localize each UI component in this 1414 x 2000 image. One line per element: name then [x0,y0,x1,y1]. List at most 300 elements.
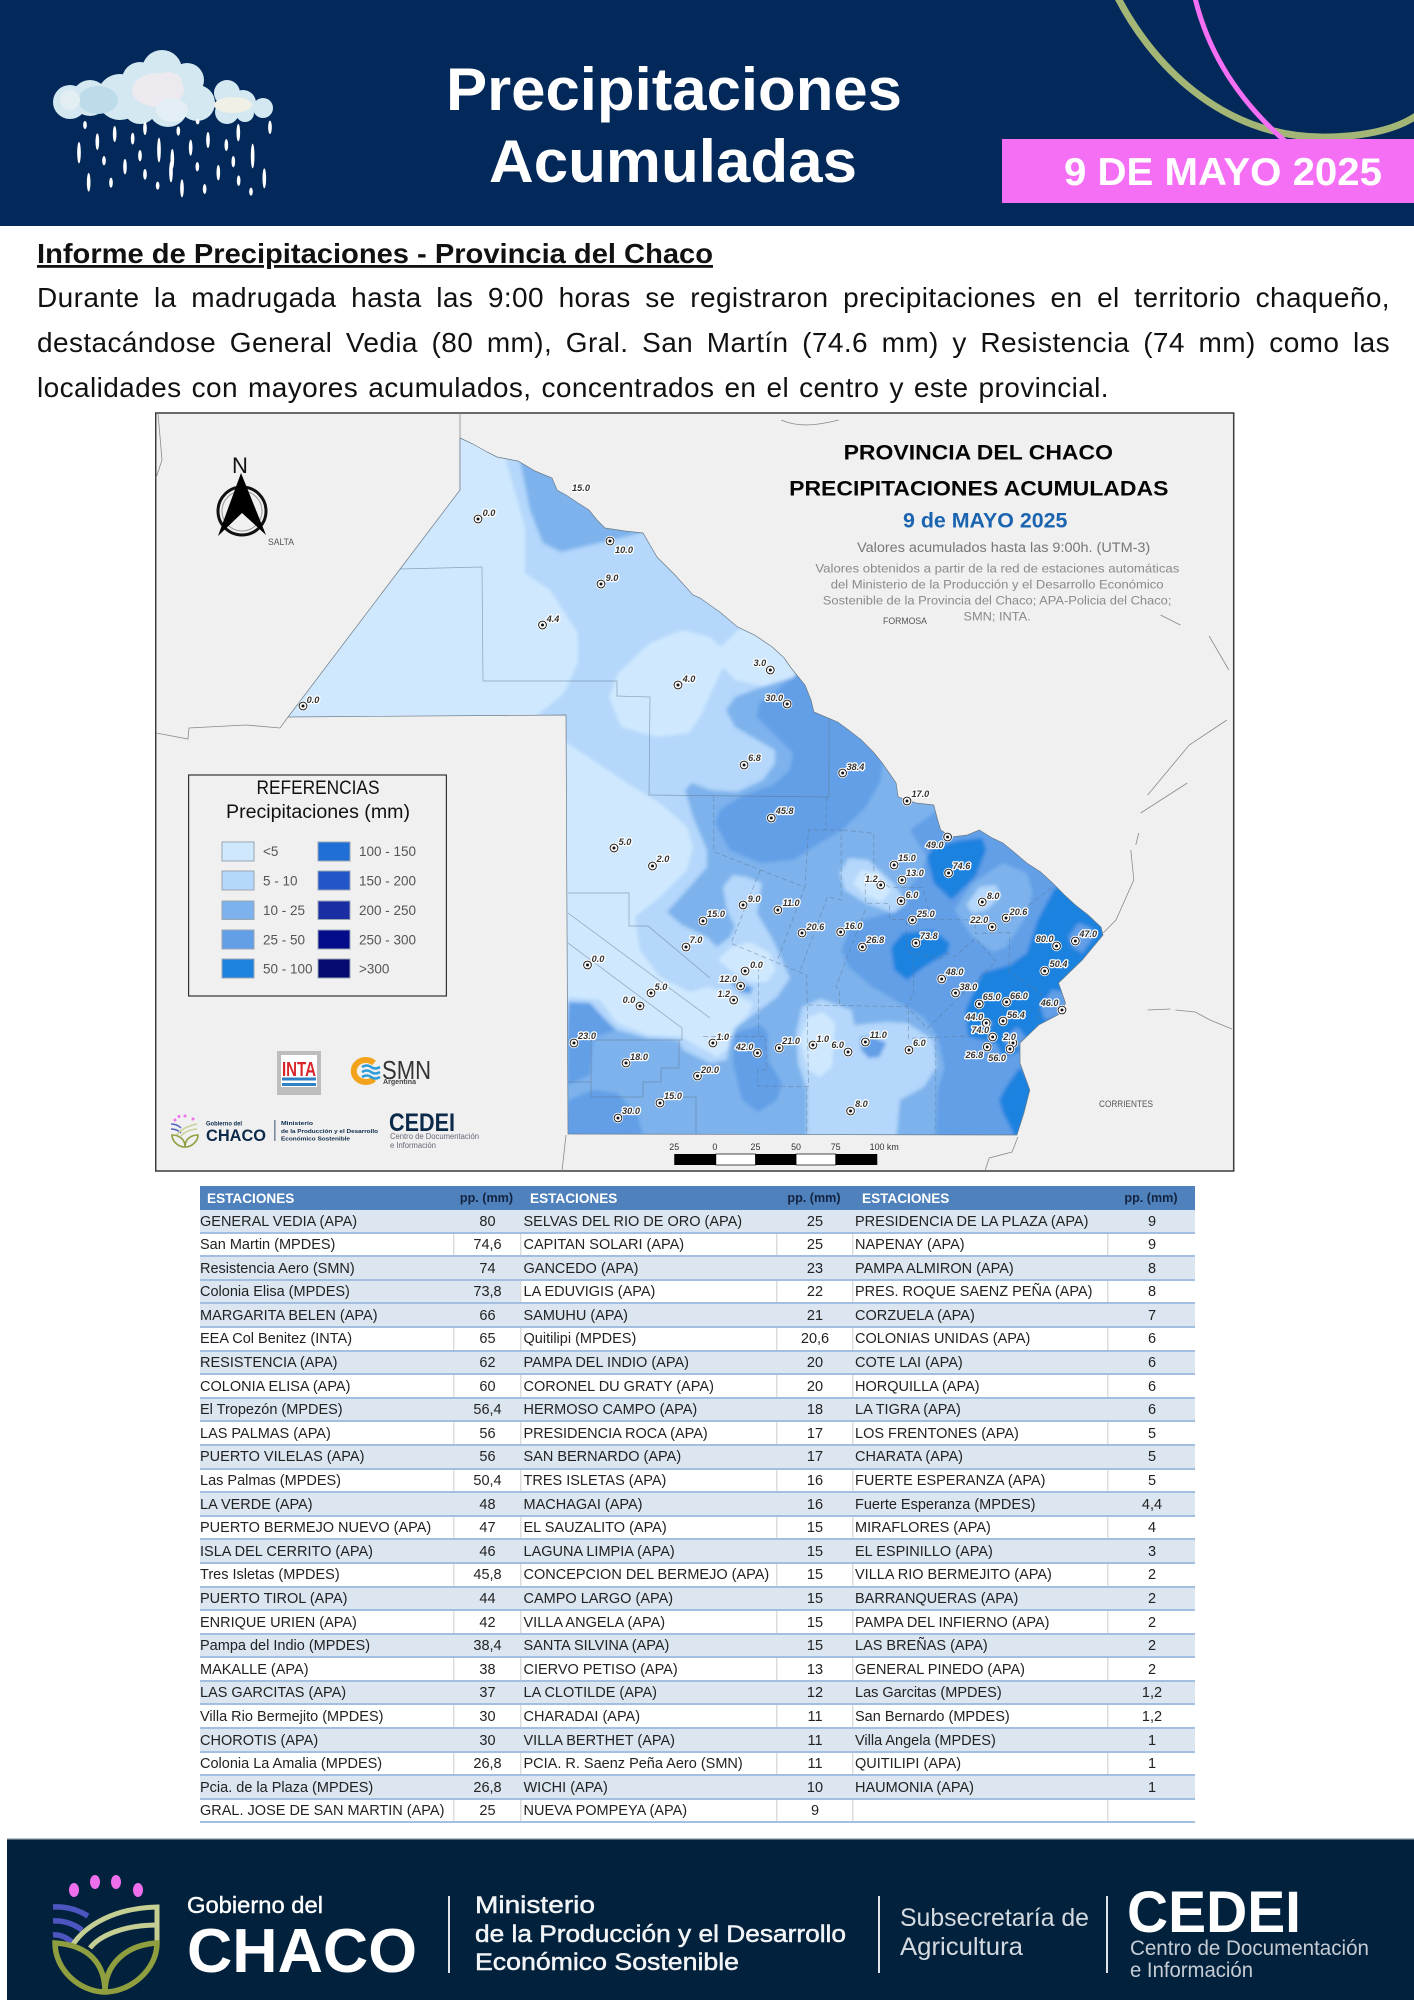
map title block: Valores obtenidos a partir de la red de estaciones automáticas [815,561,1179,576]
station value labels: 12.0 [719,974,737,984]
station value labels: 0.0 [592,954,605,964]
rainfall zones [289,438,1103,1135]
stations table: CIERVO PETISO (APA) [524,1662,678,1678]
station value labels: 0.0 [483,508,496,518]
stations table: 2 [1148,1591,1156,1607]
station value labels: 30.0 [622,1106,641,1116]
stations table: LA VERDE (APA) [200,1497,313,1513]
stations table: MAKALLE (APA) [200,1662,309,1678]
stations table: COTE LAI (APA) [855,1355,963,1371]
station value labels: 8.0 [987,891,999,901]
legend: Precipitaciones (mm) [226,802,410,823]
legend: 200 - 250 [359,903,416,918]
logo: Gobierno del Chaco small: Gobierno del [206,1120,242,1128]
stations table: EEA Col Benitez (INTA) [200,1331,352,1347]
icon: north arrow: N [232,453,248,478]
stations table: GENERAL PINEDO (APA) [855,1662,1025,1678]
station value labels: 65.0 [983,992,1001,1002]
legend: >300 [359,962,389,976]
station value labels: 50.4 [1050,959,1067,969]
map title block: PROVINCIA DEL CHACO [844,441,1113,465]
stations table: CORZUELA (APA) [855,1308,975,1324]
station value labels: 1.2 [717,989,730,999]
neighbouring province names: SALTA [268,537,294,547]
stations table: Pcia. de la Plaza (MPDES) [200,1780,373,1796]
stations table: 38 [479,1662,496,1678]
stations table: LAGUNA LIMPIA (APA) [524,1544,675,1560]
stations table: SAMUHU (APA) [524,1308,628,1324]
logo: SMN: Argentina [383,1079,416,1086]
stations table: 17 [807,1426,823,1442]
stations table: ENRIQUE URIEN (APA) [200,1615,357,1631]
stations table: 2 [1148,1615,1156,1631]
station value labels: 16.0 [845,921,862,931]
map title block: Sostenible de la Provincia del Chaco; APA-Policia del Chaco; [823,593,1171,608]
stations table: 73,8 [473,1284,502,1300]
stations table: Pampa del Indio (MPDES) [200,1638,370,1654]
table header: ESTACIONES [862,1191,949,1206]
station value labels: 11.0 [870,1030,887,1040]
stations table: 15 [807,1567,823,1583]
station value labels: 26.8 [964,1050,984,1060]
stations table: LA EDUVIGIS (APA) [524,1284,655,1300]
rainfall map panel [155,412,1234,1172]
stations table: Fuerte Esperanza (MPDES) [855,1497,1036,1513]
station value labels: 4.0 [682,674,696,684]
text: Ministerio: Económico Sostenible [475,1949,739,1976]
stations table: QUITILIPI (APA) [855,1756,961,1772]
stations table: GRAL. JOSE DE SAN MARTIN (APA) [200,1803,444,1819]
stations table: 15 [807,1544,823,1560]
stations table: TRES ISLETAS (APA) [524,1473,666,1489]
station value labels: 38.0 [960,982,977,992]
table header: ESTACIONES [530,1191,617,1206]
station value labels: 1.0 [716,1032,729,1042]
station value labels: 15.0 [898,853,916,863]
stations table: MIRAFLORES (APA) [855,1520,991,1536]
date badge: 9 DE MAYO 2025 [1064,151,1382,194]
scale bar: 50 [791,1142,801,1152]
stations table: 22 [807,1284,823,1300]
stations table: NAPENAY (APA) [855,1237,965,1253]
station value labels: 20.0 [700,1065,720,1075]
stations table: 5 [1148,1449,1156,1465]
legend: REFERENCIAS [256,778,380,799]
map title block: PRECIPITACIONES ACUMULADAS [789,477,1169,501]
stations table: 30 [479,1733,496,1749]
stations table: COLONIAS UNIDAS (APA) [855,1331,1030,1347]
stations table: 1,2 [1142,1685,1162,1701]
stations table: 9 [811,1803,819,1819]
stations table: LA TIGRA (APA) [855,1402,961,1418]
station value labels: 6.0 [906,890,918,900]
title: Precipitaciones [446,56,902,123]
station value labels: 6.0 [913,1038,926,1048]
stations table: GANCEDO (APA) [524,1261,638,1277]
station value labels: 1.2 [865,874,878,884]
stations table: 4 [1148,1520,1156,1536]
station value labels: 38.4 [847,762,864,772]
logo: Gobierno del Chaco small: Ministerio [281,1121,314,1127]
report body text: localidades con mayores acumulados, concentrados en el centro y este provincial. [37,372,1109,403]
stations table: PRESIDENCIA ROCA (APA) [524,1426,708,1442]
stations table: 44 [479,1591,496,1607]
stations table: Quitilipi (MPDES) [524,1331,636,1347]
stations table [200,1186,1195,1823]
station value labels: 5.0 [655,982,668,992]
text: CEDEI: Centro de Documentación [1130,1937,1369,1960]
text: Ministerio [475,1892,846,1976]
station value labels: 23.0 [577,1031,597,1041]
report body text: destacándose General Vedia (80 mm), Gral. San Martín (74.6 mm) y Resistencia (74 mm) como las [37,326,1390,358]
stations table: 48 [479,1497,496,1513]
stations table: 15 [807,1520,823,1536]
logo: CEDEI small: e Información [390,1141,436,1150]
stations table: CAPITAN SOLARI (APA) [524,1237,684,1253]
stations table: PRES. ROQUE SAENZ PEÑA (APA) [855,1284,1092,1300]
station value labels: 74.6 [953,861,971,871]
stations table: 11 [807,1733,823,1749]
station value labels: 25.0 [916,909,935,919]
stations table: Colonia La Amalia (MPDES) [200,1756,382,1772]
neighbouring province names [268,537,1153,1109]
stations table: 46 [479,1544,496,1560]
stations table: GENERAL VEDIA (APA) [200,1214,357,1230]
station value labels: 22.0 [969,915,988,925]
station value labels: 73.8 [920,931,939,941]
stations table: WICHI (APA) [524,1780,608,1796]
stations table: 1 [1148,1780,1156,1796]
stations table: 5 [1148,1473,1156,1489]
station value labels: 8.0 [855,1099,868,1109]
decorative arcs [1118,0,1414,141]
stations table: 20,6 [801,1331,829,1347]
table header: pp. (mm) [787,1191,841,1205]
station value labels: 15.0 [707,909,726,919]
station value labels: 10.0 [615,545,634,555]
station value labels: 80.0 [1036,934,1054,944]
stations table: 15 [807,1638,823,1654]
stations table: MACHAGAI (APA) [524,1497,642,1513]
stations table: LA CLOTILDE (APA) [524,1685,657,1701]
stations table: 8 [1148,1284,1156,1300]
stations table: 16 [807,1497,823,1513]
stations table: 6 [1148,1402,1156,1418]
stations table: 30 [479,1709,496,1725]
stations table: LAS GARCITAS (APA) [200,1685,346,1701]
station value labels: 42.0 [735,1042,753,1052]
stations table: CORONEL DU GRATY (APA) [524,1379,714,1395]
map title block: 9 de MAYO 2025 [903,509,1068,533]
legend: 100 - 150 [359,844,416,859]
stations table: 2 [1148,1638,1156,1654]
station value labels: 30.0 [765,693,783,703]
stations table: 9 [1148,1237,1156,1253]
stations table: 23 [807,1261,823,1277]
stations table: 26,8 [473,1780,502,1796]
logo: SMN: SMN [382,1055,431,1085]
table header: pp. (mm) [1124,1191,1178,1205]
text: Gobierno del Chaco: Gobierno del [187,1892,323,1918]
footer banner [7,1838,1414,2000]
logo: CEDEI small: CEDEI [389,1109,455,1137]
station value labels: 0.0 [750,960,763,970]
station value labels: 7.0 [690,935,703,945]
text: CEDEI: CEDEI [1127,1880,1301,1945]
stations table: 65 [479,1331,496,1347]
map title block: del Ministerio de la Producción y el Desarrollo Económico [831,577,1164,592]
stations table: EL SAUZALITO (APA) [524,1520,667,1536]
stations table: HAUMONIA (APA) [855,1780,974,1796]
station value labels: 56.0 [988,1053,1006,1063]
stations table: PAMPA DEL INDIO (APA) [524,1355,689,1371]
stations table: PUERTO VILELAS (APA) [200,1449,364,1465]
stations table: VILLA BERTHET (APA) [524,1733,675,1749]
report body text [37,282,1390,403]
station value labels: 26.8 [865,935,885,945]
station value labels: 21.0 [781,1036,800,1046]
stations table: CHOROTIS (APA) [200,1733,318,1749]
station value labels: 56.4 [1007,1010,1025,1020]
stations table: PCIA. R. Saenz Peña Aero (SMN) [524,1756,743,1772]
legend: 150 - 200 [359,874,416,888]
stations table: EL ESPINILLO (APA) [855,1544,993,1560]
station value labels: 15.0 [664,1091,683,1101]
stations table: VILLA ANGELA (APA) [524,1615,665,1631]
station value labels: 0.0 [307,695,320,705]
station value labels: 20.6 [1009,907,1028,917]
station value labels: 46.0 [1040,998,1058,1008]
stations table: 15 [807,1615,823,1631]
map title block: Valores acumulados hasta las 9:00h. (UTM-3) [857,539,1150,555]
stations table: 6 [1148,1331,1156,1347]
department boundaries [400,567,1053,1134]
stations table: FUERTE ESPERANZA (APA) [855,1473,1045,1489]
stations table: Tres Isletas (MPDES) [200,1567,340,1583]
stations table: SELVAS DEL RIO DE ORO (APA) [524,1214,742,1230]
stations table: 6 [1148,1379,1156,1395]
logo: SMN [354,1055,431,1086]
station value labels: 9.0 [606,573,619,583]
stations table: Colonia Elisa (MPDES) [200,1284,350,1300]
logo: Gobierno del Chaco small: de la Producción y el Desarrollo [281,1129,379,1135]
stations table: BARRANQUERAS (APA) [855,1591,1018,1607]
scale bar: 0 [712,1142,717,1152]
stations table: 8 [1148,1261,1156,1277]
stations table: PUERTO BERMEJO NUEVO (APA) [200,1520,431,1536]
stations table: 47 [479,1520,496,1536]
table header: pp. (mm) [460,1191,513,1205]
stations table: 60 [479,1379,496,1395]
stations table: COLONIA ELISA (APA) [200,1379,350,1395]
station value labels: 4.4 [546,614,559,624]
logo: Gobierno del Chaco leaves [53,1875,157,1992]
legend: <5 [263,844,278,859]
logo: Gobierno del Chaco small: CHACO [206,1126,266,1145]
stations table: 56 [479,1426,496,1442]
station value labels: 13.0 [906,868,924,878]
stations table: 50,4 [473,1473,502,1489]
stations table: SAN BERNARDO (APA) [524,1449,681,1465]
stations table: 56 [479,1449,496,1465]
stations table: 15 [807,1591,823,1607]
station value labels: 11.0 [783,898,800,908]
stations table: CHARADAI (APA) [524,1709,640,1725]
stations table: 16 [807,1473,823,1489]
station value labels: 3.0 [754,658,766,668]
map title block [789,441,1179,624]
icon: rain cloud [53,50,273,197]
station value labels: 0.0 [623,995,636,1005]
text: Subsecretaría [900,1904,1089,1961]
stations table: RESISTENCIA (APA) [200,1355,338,1371]
stations table: 7 [1148,1308,1156,1324]
legend: 50 - 100 [263,962,313,976]
logo: Gobierno del Chaco small: Económico Sostenible [281,1136,350,1142]
title [446,56,902,195]
stations table: El Tropezón (MPDES) [200,1402,343,1418]
station value labels: 9.0 [748,894,760,904]
stations table: CONCEPCION DEL BERMEJO (APA) [524,1567,769,1583]
logo: INTA: INTA [282,1059,316,1081]
legend: 10 - 25 [263,903,305,918]
stations table: LAS BREÑAS (APA) [855,1638,988,1654]
stations table: Villa Rio Bermejito (MPDES) [200,1709,383,1725]
station value labels: 15.0 [572,483,591,493]
text: CEDEI [1127,1880,1369,1982]
scale bar [669,1142,899,1165]
station value labels: 5.0 [619,837,632,847]
report heading: Informe de Precipitaciones - Provincia del Chaco [37,238,713,269]
stations table: San Bernardo (MPDES) [855,1709,1010,1725]
station value labels: 47.0 [1078,929,1097,939]
province outline [288,438,1103,1135]
station value labels: 48.0 [945,967,963,977]
scale bar: 75 [831,1142,841,1152]
stations table: 74 [479,1261,496,1277]
stations table: 4,4 [1142,1497,1162,1513]
title: Acumuladas [489,128,857,195]
station value labels: 2.0 [656,854,670,864]
text: CEDEI: e Información [1130,1959,1253,1982]
stations table: San Martin (MPDES) [200,1237,335,1253]
station value labels: 18.0 [630,1052,649,1062]
station markers [298,514,1081,1123]
station value labels: 45.8 [775,806,794,816]
stations table: 38,4 [473,1638,502,1654]
stations table: Las Palmas (MPDES) [200,1473,341,1489]
stations table: 6 [1148,1355,1156,1371]
stations table: PUERTO TIROL (APA) [200,1591,347,1607]
stations table: 12 [807,1685,823,1701]
stations table: NUEVA POMPEYA (APA) [524,1803,687,1819]
legend [189,775,446,996]
neighbouring province names: CORRIENTES [1099,1099,1153,1109]
stations table: Las Garcitas (MPDES) [855,1685,1002,1701]
logo: Gobierno del Chaco small [171,1114,379,1147]
stations table: 62 [479,1355,496,1371]
stations table: 1 [1148,1733,1156,1749]
stations table: 18 [807,1402,823,1418]
text: Gobierno del Chaco: CHACO [187,1917,417,1986]
stations table: 74,6 [473,1237,502,1253]
stations table: 26,8 [473,1756,502,1772]
station value labels: 6.0 [831,1040,844,1050]
stations table: Resistencia Aero (SMN) [200,1261,355,1277]
stations table: 17 [807,1449,823,1465]
station value labels: 2.0 [1002,1032,1016,1042]
station value labels: 74.0 [971,1025,989,1035]
stations table: CAMPO LARGO (APA) [524,1591,673,1607]
neighbouring province boundaries [156,413,1232,1171]
stations table: HORQUILLA (APA) [855,1379,980,1395]
stations table: CHARATA (APA) [855,1449,963,1465]
station value labels: 17.0 [912,789,929,799]
stations table: 25 [479,1803,496,1819]
logo: INTA [277,1051,321,1095]
scale bar: 100 km [870,1142,899,1152]
stations table: PRESIDENCIA DE LA PLAZA (APA) [855,1214,1088,1230]
scale bar: 25 [669,1142,679,1152]
icon: north arrow [218,453,266,536]
table header: ESTACIONES [207,1191,294,1206]
date badge [1002,139,1414,203]
stations table: 1 [1148,1756,1156,1772]
logo: CEDEI small: Centro de Documentación [390,1132,479,1141]
stations table: 11 [807,1709,823,1725]
stations table: 5 [1148,1426,1156,1442]
stations table: 20 [807,1379,823,1395]
stations table: 80 [479,1214,496,1230]
legend: 5 - 10 [263,874,298,888]
stations table: 2 [1148,1662,1156,1678]
stations table: 13 [807,1662,823,1678]
stations table: PAMPA DEL INFIERNO (APA) [855,1615,1049,1631]
stations table: LOS FRENTONES (APA) [855,1426,1019,1442]
stations table: 56,4 [473,1402,502,1418]
stations table: 1,2 [1142,1709,1162,1725]
stations table: 10 [807,1780,823,1796]
station value labels: 44.0 [964,1012,983,1022]
scale bar: 25 [751,1142,760,1152]
stations table: 37 [479,1685,496,1701]
station value labels: 1.0 [816,1034,829,1044]
header banner [0,0,1414,226]
map title block: SMN; INTA. [963,609,1031,624]
station value labels: 66.0 [1010,991,1028,1001]
stations table: ISLA DEL CERRITO (APA) [200,1544,373,1560]
stations table: MARGARITA BELEN (APA) [200,1308,378,1324]
stations table: VILLA RIO BERMEJITO (APA) [855,1567,1052,1583]
text: Ministerio: Ministerio [475,1892,595,1919]
stations table: 20 [807,1355,823,1371]
stations table: LAS PALMAS (APA) [200,1426,331,1442]
legend: 25 - 50 [263,932,305,948]
neighbouring province names: FORMOSA [883,616,927,626]
station value labels: 49.0 [925,840,944,850]
text: Subsecretaría: Agricultura [900,1933,1023,1961]
text: Subsecretaría: Subsecretaría de [900,1904,1089,1932]
logo: CEDEI small [389,1109,479,1150]
stations table: HERMOSO CAMPO (APA) [524,1402,697,1418]
stations table: 11 [807,1756,823,1772]
stations table: 2 [1148,1567,1156,1583]
station value labels: 20.6 [806,922,825,932]
stations table: Villa Angela (MPDES) [855,1733,996,1749]
stations table: PAMPA ALMIRON (APA) [855,1261,1014,1277]
stations table: 21 [807,1308,823,1324]
stations table: 3 [1148,1544,1156,1560]
